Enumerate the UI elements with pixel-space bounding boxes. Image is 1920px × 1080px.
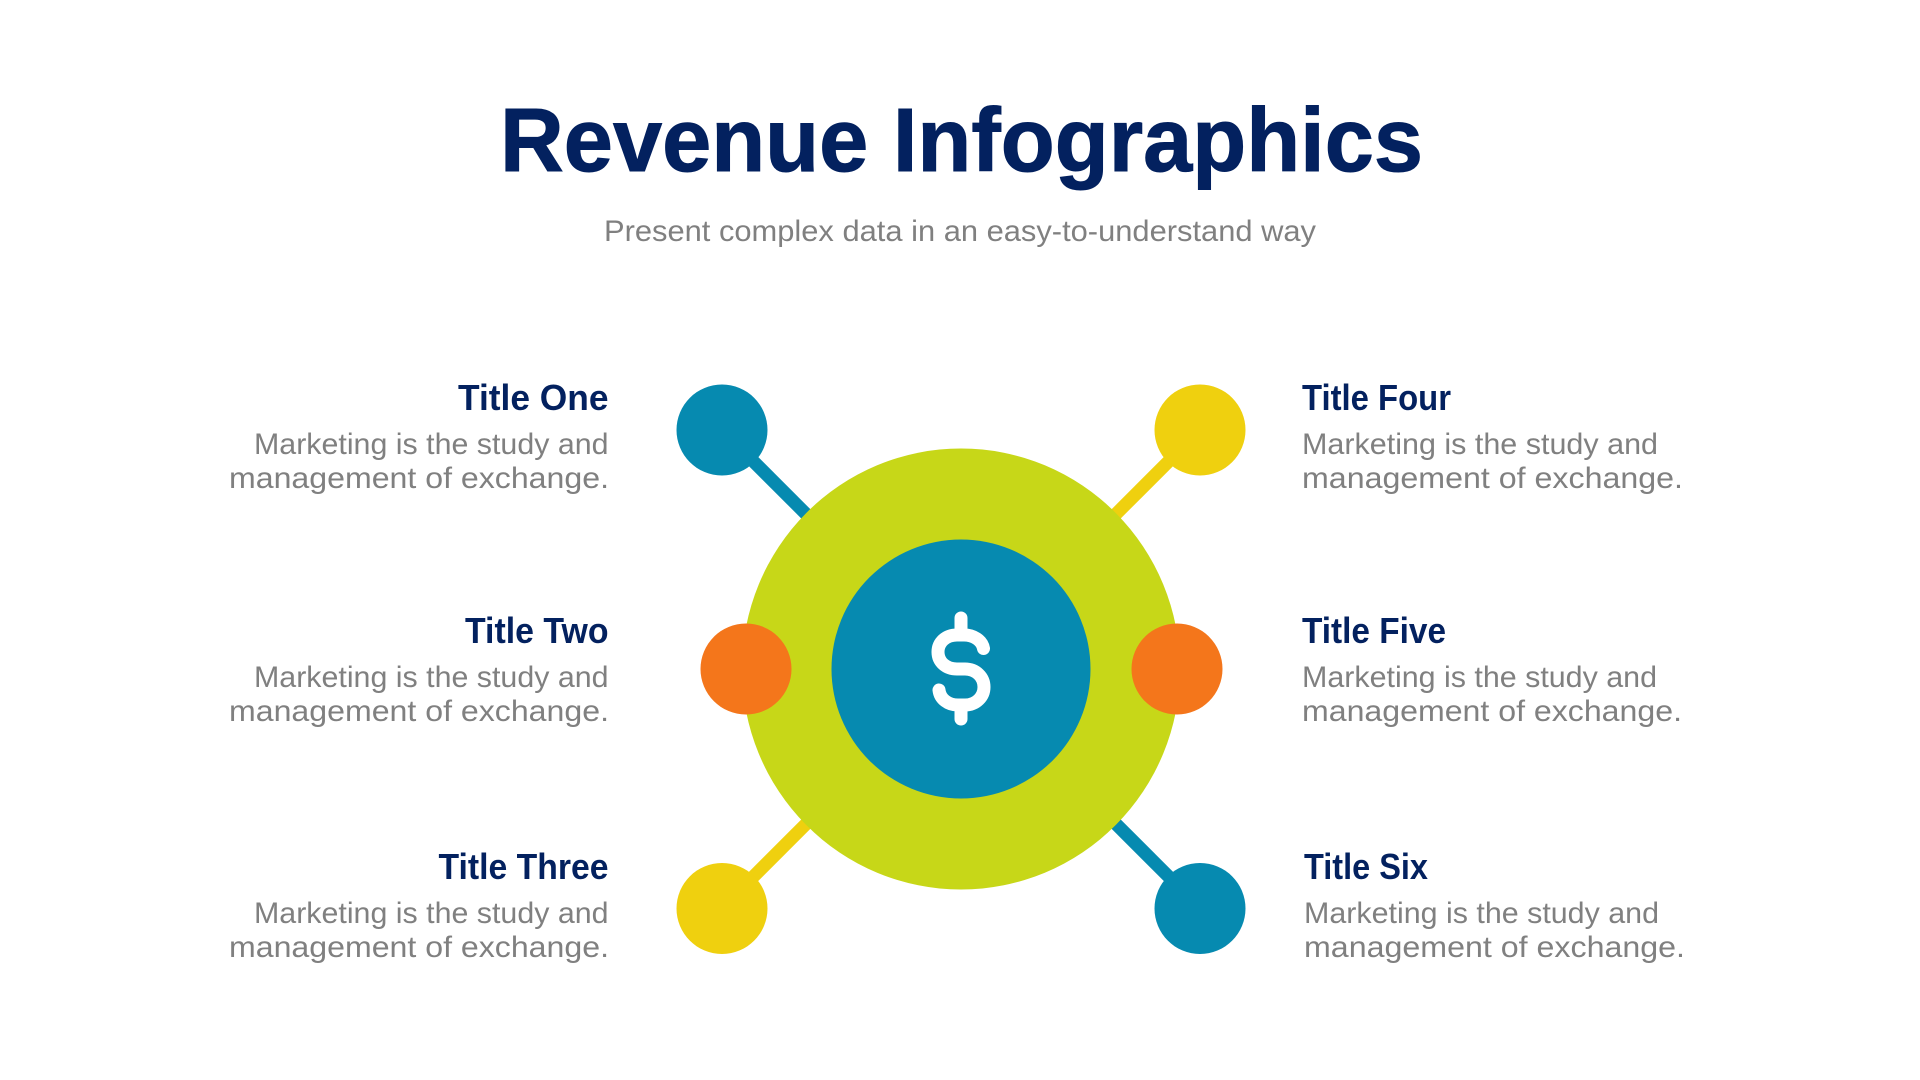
connector: top left bbox=[722, 430, 815, 523]
body bbox=[229, 897, 609, 964]
node: top right yellow bbox=[1154, 384, 1246, 476]
connector: top right bbox=[1107, 430, 1200, 523]
icon: dollar sign bbox=[938, 618, 984, 719]
body: Marketing is the study and bbox=[1302, 428, 1658, 461]
heading: Title Five bbox=[1302, 610, 1446, 651]
node: middle left orange bbox=[700, 624, 792, 714]
subtitle: Present complex data in an easy-to-understand way bbox=[604, 215, 1316, 248]
text block: Title Four bbox=[1302, 377, 1683, 495]
body bbox=[1304, 897, 1685, 964]
body: management of exchange. bbox=[1304, 931, 1685, 964]
heading: Title Three bbox=[438, 846, 608, 887]
text block: Title Two bbox=[229, 610, 609, 728]
body bbox=[229, 428, 609, 495]
body bbox=[229, 661, 609, 728]
heading: Title One bbox=[458, 377, 608, 418]
body bbox=[1302, 661, 1682, 728]
heading: Title Two bbox=[465, 610, 608, 651]
heading: Title Six bbox=[1304, 846, 1428, 887]
connector: bottom left bbox=[722, 815, 815, 908]
body: Marketing is the study and bbox=[1304, 897, 1659, 930]
body: management of exchange. bbox=[229, 931, 609, 964]
node: middle right orange bbox=[1132, 624, 1222, 714]
text block: Title Three bbox=[229, 846, 609, 964]
text block: Title Six bbox=[1304, 846, 1685, 964]
body: management of exchange. bbox=[229, 462, 609, 495]
body: Marketing is the study and bbox=[254, 661, 608, 694]
body: Marketing is the study and bbox=[1302, 661, 1657, 694]
central hub diagram bbox=[676, 384, 1246, 954]
inner blue circle bbox=[832, 540, 1090, 798]
body: Marketing is the study and bbox=[254, 897, 608, 930]
connector: bottom right bbox=[1107, 815, 1200, 908]
outer green circle bbox=[742, 448, 1180, 890]
node: bottom right blue bbox=[1154, 863, 1246, 954]
text block: Title Five bbox=[1302, 610, 1682, 728]
title: Revenue Infographics bbox=[500, 91, 1423, 191]
node: top left blue bbox=[676, 384, 768, 476]
body: management of exchange. bbox=[229, 695, 609, 728]
heading: Title Four bbox=[1302, 377, 1451, 418]
body: management of exchange. bbox=[1302, 695, 1682, 728]
body: management of exchange. bbox=[1302, 462, 1683, 495]
text block: Title One bbox=[229, 377, 609, 495]
body: Marketing is the study and bbox=[254, 428, 608, 461]
node: bottom left yellow bbox=[676, 863, 768, 954]
body bbox=[1302, 428, 1683, 495]
